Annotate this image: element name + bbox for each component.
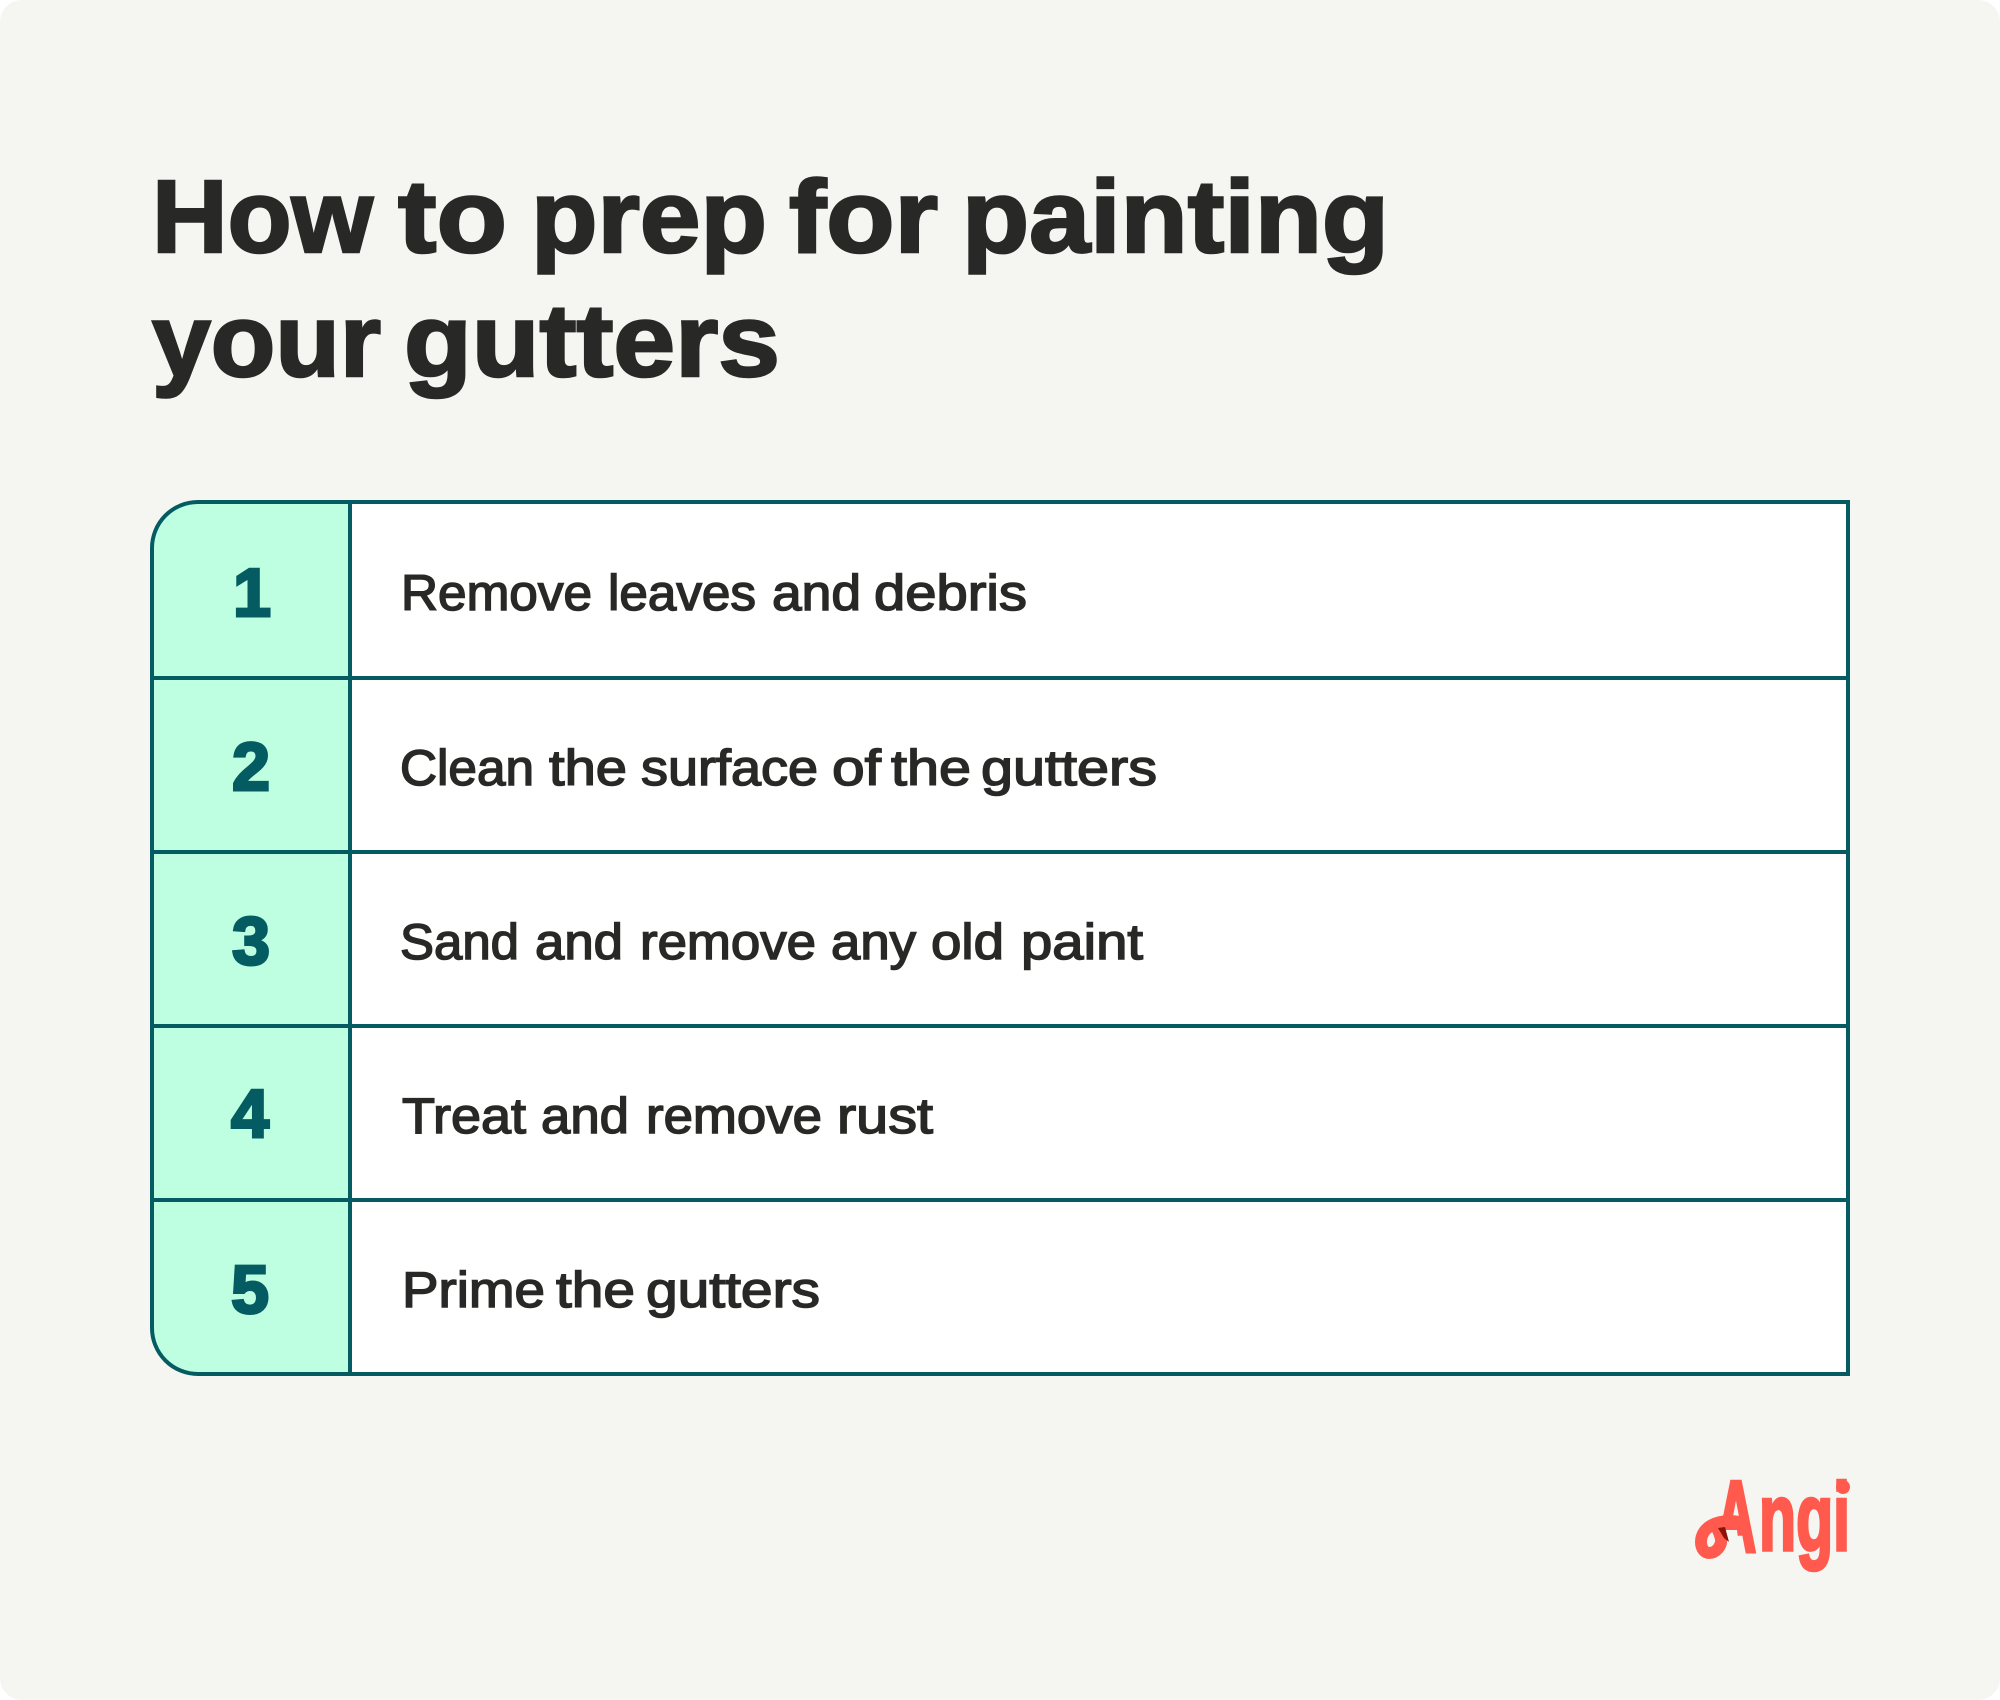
step 4: [231, 1076, 933, 1152]
step 3: and: [535, 914, 623, 970]
step 5: 5: [231, 1252, 269, 1328]
step 5: [231, 1252, 820, 1328]
step 1: debris: [874, 565, 1027, 621]
title: painting: [962, 159, 1389, 274]
table grid lines: [152, 502, 1848, 1374]
step 3: remove: [640, 914, 816, 970]
step 3: any: [831, 914, 916, 970]
title: your: [152, 283, 381, 398]
step 1: Remove: [401, 565, 592, 621]
step 2: the: [891, 740, 971, 796]
step 1: [233, 555, 1027, 631]
step 4: 4: [231, 1076, 269, 1152]
logo: Angi: ngi: [1759, 1464, 1850, 1571]
step 2: Clean: [400, 740, 534, 796]
step 3: old: [931, 914, 1004, 970]
step 4: remove: [646, 1088, 822, 1144]
step 2: the: [549, 740, 627, 796]
step 1: leaves: [608, 565, 756, 621]
title: How: [152, 159, 374, 274]
title: gutters: [404, 283, 780, 398]
title: prep: [531, 159, 767, 274]
step 5: the: [556, 1262, 635, 1318]
step 4: and: [541, 1088, 629, 1144]
step 4: Treat: [402, 1088, 526, 1144]
step 3: 3: [232, 903, 270, 979]
step 3: [232, 903, 1143, 979]
step 3: Sand: [400, 914, 519, 970]
logo: Angi: A: [1716, 1461, 1756, 1573]
step 2: of: [832, 740, 881, 796]
title: to: [398, 159, 507, 274]
step 2: gutters: [981, 740, 1157, 796]
text column background: [350, 502, 1847, 1374]
step 4: rust: [837, 1088, 933, 1144]
step 1: 1: [233, 555, 271, 631]
step 1: and: [772, 565, 861, 621]
step 5: Prime: [402, 1262, 545, 1318]
step 2: 2: [232, 729, 270, 805]
step 5: gutters: [646, 1262, 820, 1318]
step 2: surface: [641, 740, 818, 796]
title: for: [789, 159, 938, 274]
step 3: paint: [1021, 914, 1143, 970]
logo: Angi: [1701, 1461, 1850, 1573]
number column background: [152, 502, 350, 1374]
title: [152, 159, 1389, 398]
step 2: [232, 729, 1157, 805]
table: preparation steps: [152, 502, 1848, 1374]
